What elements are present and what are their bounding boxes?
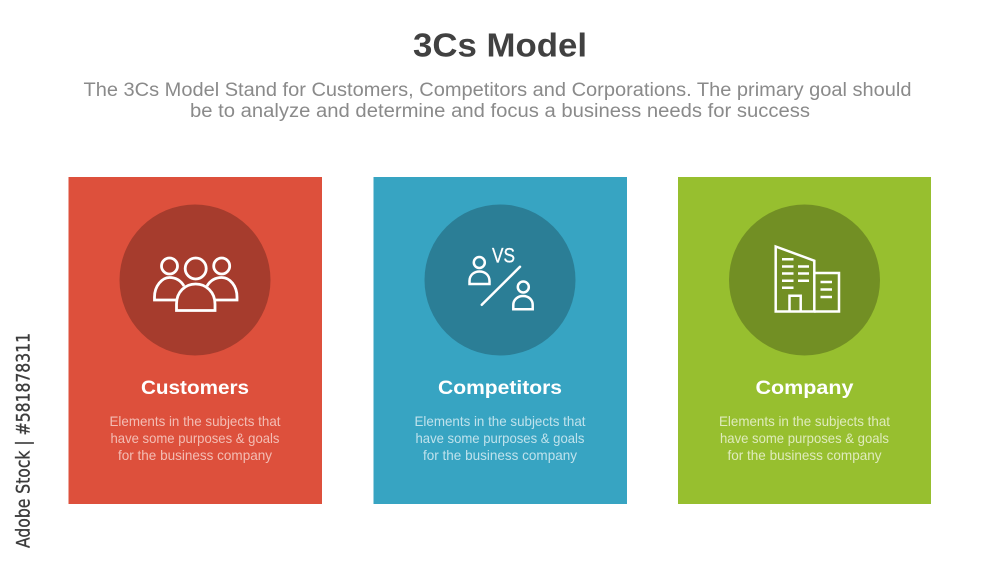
description: company: for the business company: [728, 447, 882, 463]
panel: customers: [68, 177, 322, 504]
subtitle text: be to analyze and determine and focus a business needs for success: [190, 101, 810, 122]
heading: company: Company: [756, 377, 854, 399]
description: customers: [110, 413, 281, 463]
description: company: [719, 413, 890, 463]
description: company: Elements in the subjects that: [719, 413, 890, 429]
icon: versus: [470, 244, 533, 309]
description: customers: for the business company: [118, 447, 272, 463]
icon: building: [776, 246, 839, 312]
icon circle: competitors: [424, 204, 576, 356]
panel: competitors: [374, 177, 627, 504]
subtitle text: [84, 80, 912, 122]
description: competitors: have some purposes & goals: [416, 430, 584, 446]
subtitle text: The 3Cs Model Stand for Customers, Competitors and Corporations. The primary goal should: [84, 80, 912, 101]
icon circle: customers: [120, 204, 270, 356]
description: competitors: for the business company: [423, 447, 577, 463]
panel: company: [678, 177, 931, 504]
description: competitors: [414, 413, 586, 463]
description: company: have some purposes & goals: [720, 430, 889, 446]
heading: competitors: Competitors: [438, 377, 562, 399]
icon: versus: VS: [492, 244, 515, 268]
icon: three people: [154, 258, 237, 310]
icon circle: company: [729, 204, 880, 356]
heading: customers: Customers: [141, 377, 249, 399]
stock id text: Adobe Stock | #581878311: [14, 333, 34, 548]
description: customers: Elements in the subjects that: [110, 413, 281, 429]
title: 3Cs Model: [413, 26, 587, 64]
description: competitors: Elements in the subjects that: [414, 413, 586, 429]
description: customers: have some purposes & goals: [110, 430, 280, 446]
